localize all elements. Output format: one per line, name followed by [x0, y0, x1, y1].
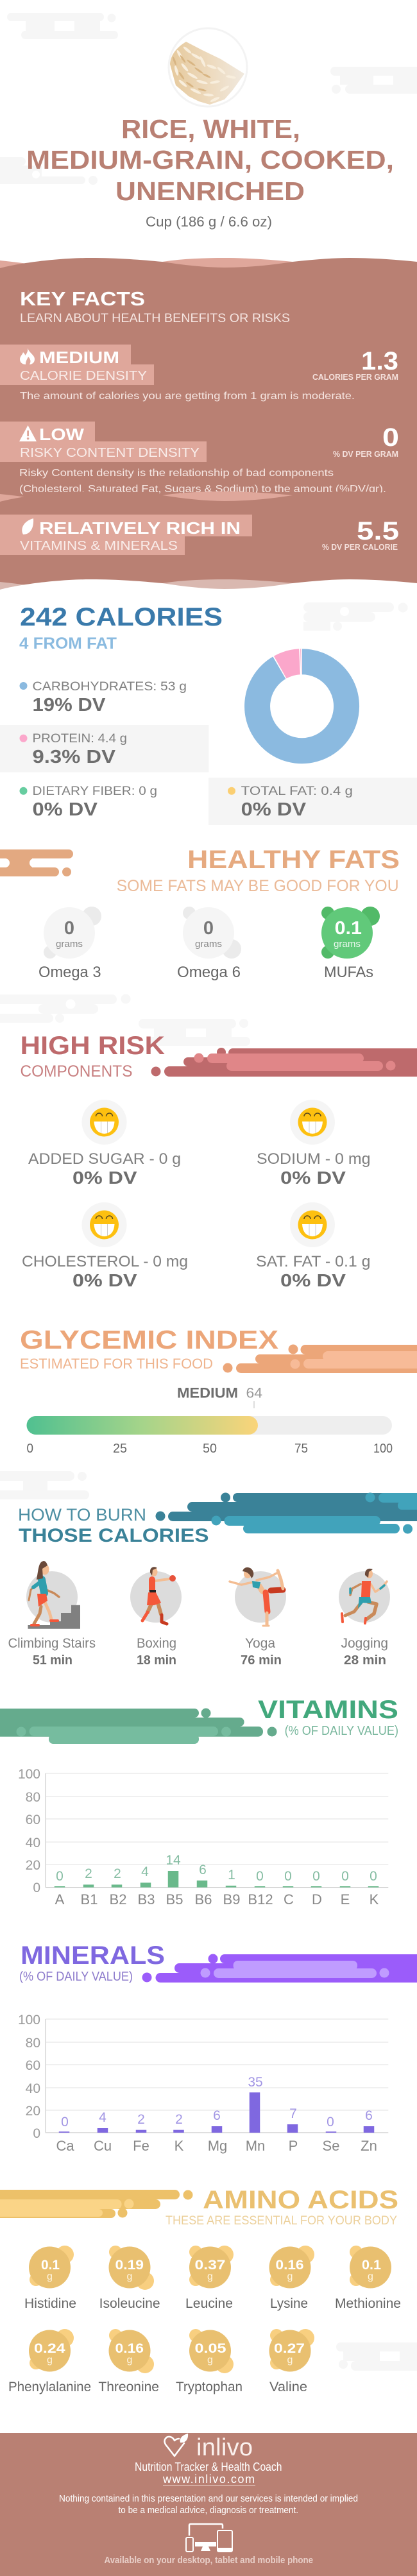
category labels: Se [323, 2138, 339, 2154]
fact: risky content density [0, 422, 399, 495]
glycemic axis: 0 [27, 1442, 33, 1456]
heading: minerals: MINERALS [21, 1941, 165, 1970]
y axis labels: 40 [26, 1836, 40, 1850]
amino acid: isoleucine: 0.19 [115, 2258, 144, 2273]
gridlines [46, 2019, 388, 2110]
category labels: P [289, 2138, 298, 2154]
amino acid: phenylalanine: 0.24 [34, 2341, 65, 2356]
category labels: Mg [208, 2138, 227, 2154]
exercise labels: 18 min [137, 1653, 176, 1668]
category labels [56, 2138, 377, 2154]
level: medium: MEDIUM [39, 348, 119, 367]
bars [59, 2092, 374, 2133]
amino acid: isoleucine [99, 2246, 160, 2311]
category labels: Cu [94, 2138, 112, 2154]
risk: cholesterol: CHOLESTEROL - 0 mg [22, 1253, 188, 1270]
background cloud: behind high risk [139, 1019, 250, 1046]
exercise labels: Jogging [341, 1636, 388, 1651]
glycemic value label: MEDIUM [177, 1385, 238, 1401]
heading: amino acids: AMINO ACIDS [203, 2186, 398, 2214]
background cloud: burn calories [0, 1471, 89, 1499]
legend: carbohydrates [19, 680, 187, 715]
bar values: 14 [166, 1853, 181, 1868]
y axis labels: 60 [26, 1813, 40, 1827]
band: medium [0, 345, 154, 385]
fat: mufas [321, 907, 380, 981]
y axis labels: 80 [26, 2036, 40, 2051]
availability note: Available on your desktop, tablet and mobile phone [104, 2555, 313, 2566]
fact: calorie density [0, 345, 398, 402]
category labels: B5 [166, 1891, 183, 1907]
logo: heart and leaf [165, 2434, 188, 2456]
amino acid: leucine: Leucine [185, 2296, 233, 2311]
heading: how to burn: HOW TO BURN [18, 1505, 146, 1524]
value: 0: 0 [382, 423, 399, 452]
description: (Cholesterol, Saturated Fat, Sugars & Sodium) to the amount (%DV/gr). [19, 484, 386, 495]
bar chart: vitamins [18, 1767, 388, 1907]
band: low [0, 422, 207, 462]
footer wave [0, 491, 417, 509]
glycemic value label [177, 1385, 262, 1408]
fat: mufas: MUFAs [324, 964, 373, 981]
heading: vitamins: VITAMINS [258, 1696, 398, 1724]
bar chart: minerals [18, 2013, 388, 2154]
category labels: B9 [223, 1891, 240, 1907]
background cloud: amino acids [336, 2342, 417, 2371]
amino acid: isoleucine: Isoleucine [99, 2296, 160, 2311]
risk: saturated fat: SAT. FAT - 0.1 g [256, 1253, 371, 1270]
bar values: 2 [175, 2112, 183, 2127]
icon: yoga pose [230, 1571, 283, 1626]
category labels: D [312, 1891, 322, 1907]
legend: dietary fiber: DIETARY FIBER: 0 g [32, 785, 157, 798]
amino acid: methionine [335, 2246, 401, 2311]
description: The amount of calories you are getting from 1 gram is moderate. [20, 391, 355, 402]
key facts subheading: LEARN ABOUT HEALTH BENEFITS OR RISKS [20, 311, 290, 325]
subheading: healthy fats: SOME FATS MAY BE GOOD FOR YOU [117, 877, 399, 895]
disclaimer [59, 2493, 358, 2516]
category labels: E [341, 1891, 350, 1907]
glycemic axis: 100 [373, 1442, 393, 1456]
amino acid: lysine [269, 2246, 314, 2311]
subheading: minerals: (% OF DAILY VALUE) [19, 1970, 133, 1984]
amino acid: lysine: g [287, 2271, 293, 2282]
fat: omega 6: Omega 6 [177, 964, 241, 981]
value: 5.5: 5.5 [357, 517, 399, 545]
exercise: jogging [339, 1569, 390, 1623]
risk: saturated fat [256, 1202, 371, 1290]
subheading: from fat: 4 FROM FAT [19, 635, 117, 653]
bar values: 0 [370, 1869, 377, 1884]
gridlines [46, 1773, 388, 1864]
fat: omega 3: 0 [64, 918, 74, 939]
amino acid: histidine: 0.1 [41, 2258, 60, 2273]
amino acid: threonine: g [127, 2355, 132, 2366]
decoration: high risk bar [151, 1048, 417, 1077]
heading: those calories: THOSE CALORIES [19, 1525, 209, 1546]
amino acid: tryptophan [176, 2329, 243, 2394]
label: risky content density: RISKY CONTENT DENSITY [20, 445, 200, 460]
amino acid: leucine [185, 2246, 234, 2311]
subheading: vitamins: (% OF DAILY VALUE) [285, 1724, 398, 1738]
icon: stairs [28, 1605, 80, 1629]
fat: omega 3 [38, 907, 101, 981]
exercise: boxing [130, 1567, 182, 1624]
icon: warning triangle [19, 425, 37, 441]
risk: cholesterol [22, 1202, 188, 1290]
glycemic value label: 64 [246, 1385, 262, 1401]
decoration: minerals bar [142, 1954, 417, 1983]
panel bottom wave [0, 579, 417, 597]
decoration: amino acids bar [0, 2190, 192, 2218]
exercise: climbing stairs [26, 1561, 80, 1629]
amino acid: tryptophan: Tryptophan [176, 2380, 243, 2394]
title: UNENRICHED [115, 176, 305, 206]
title: MEDIUM-GRAIN, COOKED, [26, 145, 394, 175]
category labels [55, 1891, 379, 1907]
exercise labels: Climbing Stairs [8, 1636, 96, 1651]
bar values: 0 [312, 1869, 320, 1884]
value: 1.3: 1.3 [361, 347, 398, 375]
bar values: 2 [137, 2112, 145, 2127]
legend: total fat: TOTAL FAT: 0.4 g [241, 785, 353, 798]
legend: carbohydrates: CARBOHYDRATES: 53 g [32, 680, 187, 694]
icon: climbing woman [29, 1580, 59, 1625]
subheading: glycemic index: ESTIMATED FOR THIS FOOD [20, 1356, 213, 1372]
category labels: Mn [246, 2138, 265, 2154]
donut chart: macronutrients [244, 649, 360, 764]
fat: omega 3: grams [56, 939, 83, 950]
y axis labels: 0 [33, 1881, 40, 1895]
bar values: 4 [99, 2110, 106, 2125]
icon: boxer [142, 1579, 169, 1624]
category labels: A [55, 1891, 65, 1907]
disclaimer: to be a medical advice, diagnosis or treatment. [118, 2505, 298, 2516]
bar values: 0 [284, 1869, 292, 1884]
amino acid: threonine: Threonine [98, 2380, 159, 2394]
icon: smiley [82, 1202, 127, 1247]
exercise: yoga [230, 1567, 286, 1626]
heading: high risk: HIGH RISK [21, 1032, 165, 1060]
label: calorie density: CALORIE DENSITY [20, 368, 147, 383]
y axis labels: 0 [33, 2126, 40, 2141]
background cloud: left of high risk [0, 994, 131, 1023]
icon: jogger [342, 1582, 387, 1623]
legend: total fat: 0% DV [241, 799, 307, 820]
category labels: B6 [195, 1891, 212, 1907]
risk: added sugar [28, 1100, 181, 1188]
risk: sodium [257, 1100, 371, 1188]
amino acid: histidine [24, 2246, 76, 2311]
y axis labels: 80 [26, 1790, 40, 1805]
icon: flame [20, 348, 35, 364]
bar values: 7 [289, 2106, 297, 2121]
label: vitamins and minerals: VITAMINS & MINERALS [20, 538, 178, 553]
icon: leaf [22, 518, 33, 534]
y axis labels: 60 [26, 2058, 40, 2073]
fat: omega 6 [177, 907, 241, 981]
icon: devices [186, 2524, 232, 2552]
bar values: 35 [248, 2075, 263, 2090]
bar values: 4 [141, 1864, 149, 1879]
glycemic gauge [27, 1416, 392, 1435]
amino acid: lysine: 0.16 [276, 2258, 304, 2273]
legend: protein [0, 725, 209, 772]
subheading: amino acids: THESE ARE ESSENTIAL FOR YOUR BODY [166, 2214, 397, 2228]
bar values: 0 [341, 1869, 349, 1884]
glycemic axis: 50 [203, 1442, 217, 1456]
amino acid: threonine: 0.16 [115, 2341, 144, 2356]
category labels: B1 [81, 1891, 98, 1907]
amino acid: valine: 0.27 [274, 2341, 305, 2356]
amino acid: tryptophan: 0.05 [195, 2341, 226, 2356]
category labels: B12 [248, 1891, 273, 1907]
amino acid: phenylalanine: g [47, 2355, 53, 2366]
fat: mufas: grams [334, 939, 361, 950]
amino acid: phenylalanine: Phenylalanine [8, 2380, 91, 2394]
risk: sodium: 0% DV [280, 1168, 346, 1188]
exercise labels: 76 min [241, 1653, 282, 1668]
amino acid: leucine: g [207, 2271, 213, 2282]
category labels: B2 [110, 1891, 126, 1907]
panel top wave [0, 258, 417, 276]
band: relatively rich [0, 515, 252, 555]
background cloud: behind title [0, 157, 98, 185]
subheading: components: COMPONENTS [21, 1062, 132, 1080]
decoration: vitamins bar [0, 1708, 277, 1744]
background cloud: calories [303, 602, 408, 631]
legend: protein: PROTEIN: 4.4 g [32, 732, 127, 746]
food image: rice in circle [169, 28, 247, 107]
description [19, 468, 386, 495]
icon: smiley [82, 1100, 127, 1145]
y axis labels: 20 [26, 2104, 40, 2119]
background cloud: top left [7, 13, 118, 39]
website link: www.inlivo.com [162, 2473, 255, 2486]
bar values: 0 [256, 1869, 264, 1884]
amino acid: valine: Valine [269, 2380, 307, 2394]
amino acid: methionine: g [368, 2271, 373, 2282]
category labels: K [370, 1891, 379, 1907]
risk: cholesterol: 0% DV [72, 1270, 137, 1290]
amino acid: methionine: Methionine [335, 2296, 401, 2311]
icon: smiley [290, 1202, 335, 1247]
bar values [61, 2075, 373, 2129]
icon: smiley [290, 1100, 335, 1145]
amino acid: tryptophan: g [207, 2355, 213, 2366]
heading: glycemic index: GLYCEMIC INDEX [20, 1325, 278, 1354]
amino acid: threonine [98, 2329, 159, 2394]
y axis labels: 40 [26, 2081, 40, 2096]
amino acid: isoleucine: g [127, 2271, 132, 2282]
bar values: 2 [85, 1866, 92, 1881]
category labels: Fe [133, 2138, 149, 2154]
serving size: Cup (186 g / 6.6 oz) [146, 214, 272, 230]
glycemic axis: 25 [113, 1442, 127, 1456]
category labels: Ca [56, 2138, 74, 2154]
amino acid: phenylalanine [8, 2329, 91, 2394]
y axis labels [18, 2013, 40, 2141]
disclaimer: Nothing contained in this presentation and our services is intended or implied [59, 2493, 358, 2504]
decoration: glycemic index bar [223, 1345, 417, 1373]
level: relatively rich in: RELATIVELY RICH IN [39, 518, 241, 538]
bar values: 0 [61, 2115, 69, 2129]
fat: mufas: 0.1 [335, 918, 362, 939]
y axis labels: 100 [18, 2013, 40, 2027]
glycemic axis: 75 [294, 1442, 308, 1456]
bar values: 2 [114, 1866, 121, 1881]
tagline: Nutrition Tracker & Health Coach [135, 2461, 282, 2473]
bar values [56, 1853, 377, 1884]
exercise labels: 51 min [33, 1653, 72, 1668]
risk: sodium: SODIUM - 0 mg [257, 1150, 371, 1168]
description: Risky Content density is the relationship of bad components [19, 468, 334, 479]
bar values: 6 [199, 1863, 207, 1877]
amino acid: valine: g [287, 2355, 293, 2366]
title: RICE, WHITE, [121, 114, 300, 144]
y axis labels [18, 1767, 40, 1895]
level: low: LOW [39, 425, 85, 444]
bar values: 0 [327, 2115, 334, 2129]
bars [55, 1871, 379, 1888]
background cloud: top right [330, 67, 417, 94]
legend: carbohydrates: 19% DV [32, 695, 106, 715]
unit: calories per gram: CALORIES PER GRAM [312, 373, 398, 382]
bar values: 6 [213, 2108, 221, 2123]
exercise labels: Boxing [137, 1636, 176, 1651]
amino acid: histidine: g [47, 2271, 53, 2282]
fat: omega 3: Omega 3 [38, 964, 101, 981]
y axis labels: 20 [26, 1858, 40, 1873]
bar values: 1 [228, 1868, 235, 1882]
legend: protein: 9.3% DV [32, 747, 116, 767]
key facts heading: KEY FACTS [20, 287, 145, 310]
title [26, 114, 394, 206]
legend: dietary fiber: 0% DV [32, 799, 98, 820]
glycemic axis [27, 1442, 393, 1456]
amino acid: leucine: 0.37 [195, 2258, 226, 2273]
risk: added sugar: ADDED SUGAR - 0 g [28, 1150, 181, 1168]
exercise labels: 28 min [344, 1653, 386, 1668]
unit: dv per calorie: % DV PER CALORIE [322, 543, 398, 552]
legend: total fat [208, 778, 417, 825]
fat: omega 6: 0 [203, 918, 214, 939]
category labels: B3 [138, 1891, 155, 1907]
exercise labels [8, 1636, 388, 1668]
fat: omega 6: grams [195, 939, 222, 950]
risk: added sugar: 0% DV [72, 1168, 137, 1188]
bar values: 0 [56, 1869, 64, 1884]
logo: inlivo: inlivo [196, 2434, 253, 2461]
legend: dietary fiber [19, 785, 157, 820]
unit: dv per gram: % DV PER GRAM [333, 450, 398, 459]
category labels: C [284, 1891, 294, 1907]
amino acid: valine [269, 2329, 314, 2394]
heading: healthy fats: HEALTHY FATS [187, 846, 400, 874]
amino acid: histidine: Histidine [24, 2296, 76, 2311]
category labels: Zn [361, 2138, 377, 2154]
decoration: burn calories bar [155, 1492, 417, 1533]
amino acid: methionine: 0.1 [362, 2258, 381, 2273]
y axis labels: 100 [18, 1767, 40, 1782]
bar values: 6 [365, 2108, 373, 2123]
fact: vitamins and minerals [0, 515, 399, 555]
heading: calories: 242 CALORIES [20, 603, 223, 631]
exercise labels: Yoga [245, 1636, 275, 1651]
category labels: K [174, 2138, 184, 2154]
panel: key facts [0, 258, 417, 597]
amino acid: lysine: Lysine [270, 2296, 308, 2311]
risk: saturated fat: 0% DV [280, 1270, 346, 1290]
decoration: healthy fats bar [0, 849, 73, 876]
